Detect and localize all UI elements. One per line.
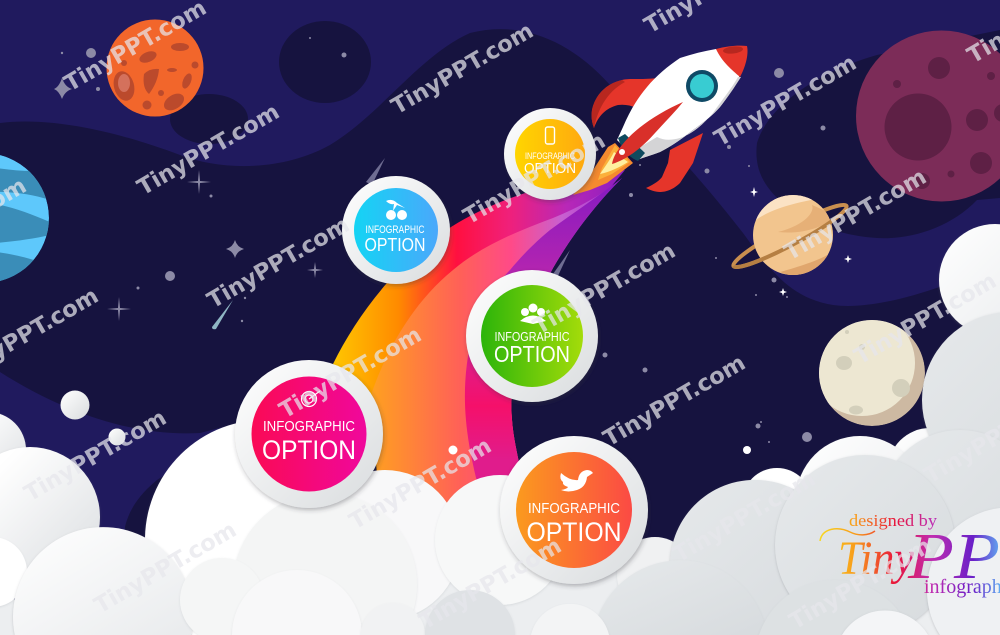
option badge: orange bird: INFOGRAPHIC (528, 500, 620, 517)
rocket center fin (612, 102, 683, 164)
rocket top fin (592, 78, 657, 128)
watermarks: TinyPPT.com (850, 268, 1000, 370)
icon: phone (546, 127, 554, 144)
dark nebula blobs (170, 21, 1000, 238)
logo: designed by TinyPPT: PP (907, 520, 1000, 593)
rocket bottom fin (646, 133, 703, 192)
option badge: green people: INFOGRAPHIC (494, 330, 570, 344)
option badge: blue cherry (342, 176, 450, 284)
watermarks: TinyPPT.com (90, 517, 241, 619)
option badge: yellow phone: OPTION (524, 160, 576, 177)
logo: designed by TinyPPT (820, 511, 1000, 598)
option badge: blue cherry: OPTION (364, 235, 426, 255)
option badge: orange bird (500, 436, 648, 584)
icon: twitter bird (560, 470, 593, 492)
rocket flame (573, 143, 633, 195)
rocket hull shade (630, 77, 741, 160)
option badge: blue cherry: INFOGRAPHIC (366, 224, 425, 236)
rocket (573, 45, 748, 195)
watermarks: TinyPPT.com (780, 164, 931, 266)
icon: cherries (386, 200, 407, 220)
option badge: green people: OPTION (494, 341, 570, 367)
planet: maroon (856, 30, 1000, 202)
watermarks: TinyPPT.com (710, 50, 861, 152)
planet: moon (819, 320, 925, 426)
rocket engine ring (618, 134, 645, 161)
option badge: green people (466, 270, 598, 402)
watermarks: TinyPPT.com (20, 405, 171, 507)
option badge: pink target: OPTION (262, 435, 356, 465)
watermarks: TinyPPT.com (345, 433, 496, 535)
logo: designed by TinyPPT: Tiny (838, 532, 915, 585)
option badge: orange bird: OPTION (526, 517, 622, 547)
option badge: pink target (235, 360, 383, 508)
white balls (60, 390, 751, 454)
watermarks: TinyPPT.com (415, 533, 566, 635)
option badge: yellow phone (504, 108, 596, 200)
rocket hull (617, 49, 740, 160)
option badge: pink target: INFOGRAPHIC (263, 418, 355, 435)
watermarks: TinyPPT.com (669, 466, 820, 568)
clouds left and center (0, 412, 609, 635)
watermarks: TinyPPT.com (387, 18, 538, 120)
option badge: yellow phone: INFOGRAPHIC (525, 151, 575, 161)
watermarks: TinyPPT.com (529, 238, 680, 340)
planet: orange mars (106, 20, 204, 116)
rocket nose (716, 46, 748, 77)
watermarks: TinyPPT.com (133, 99, 284, 201)
back clouds right (593, 224, 1000, 635)
planet: blue striped (0, 153, 50, 285)
watermarks: TinyPPT.com (599, 350, 750, 452)
watermarks: TinyPPT.com (275, 322, 426, 424)
watermarks: TinyPPT.com (203, 212, 354, 314)
rainbow trail (333, 170, 625, 510)
icon: target (302, 391, 320, 406)
stars and dust (54, 37, 852, 443)
icon: group (520, 304, 546, 324)
rocket window (686, 70, 718, 102)
logo: designed by TinyPPT: designed by (849, 511, 938, 530)
watermarks: TinyPPT.com (785, 533, 936, 635)
cloud base fill (0, 500, 1000, 635)
planet: saturn (729, 195, 851, 280)
watermarks: TinyPPT.com (459, 128, 610, 230)
